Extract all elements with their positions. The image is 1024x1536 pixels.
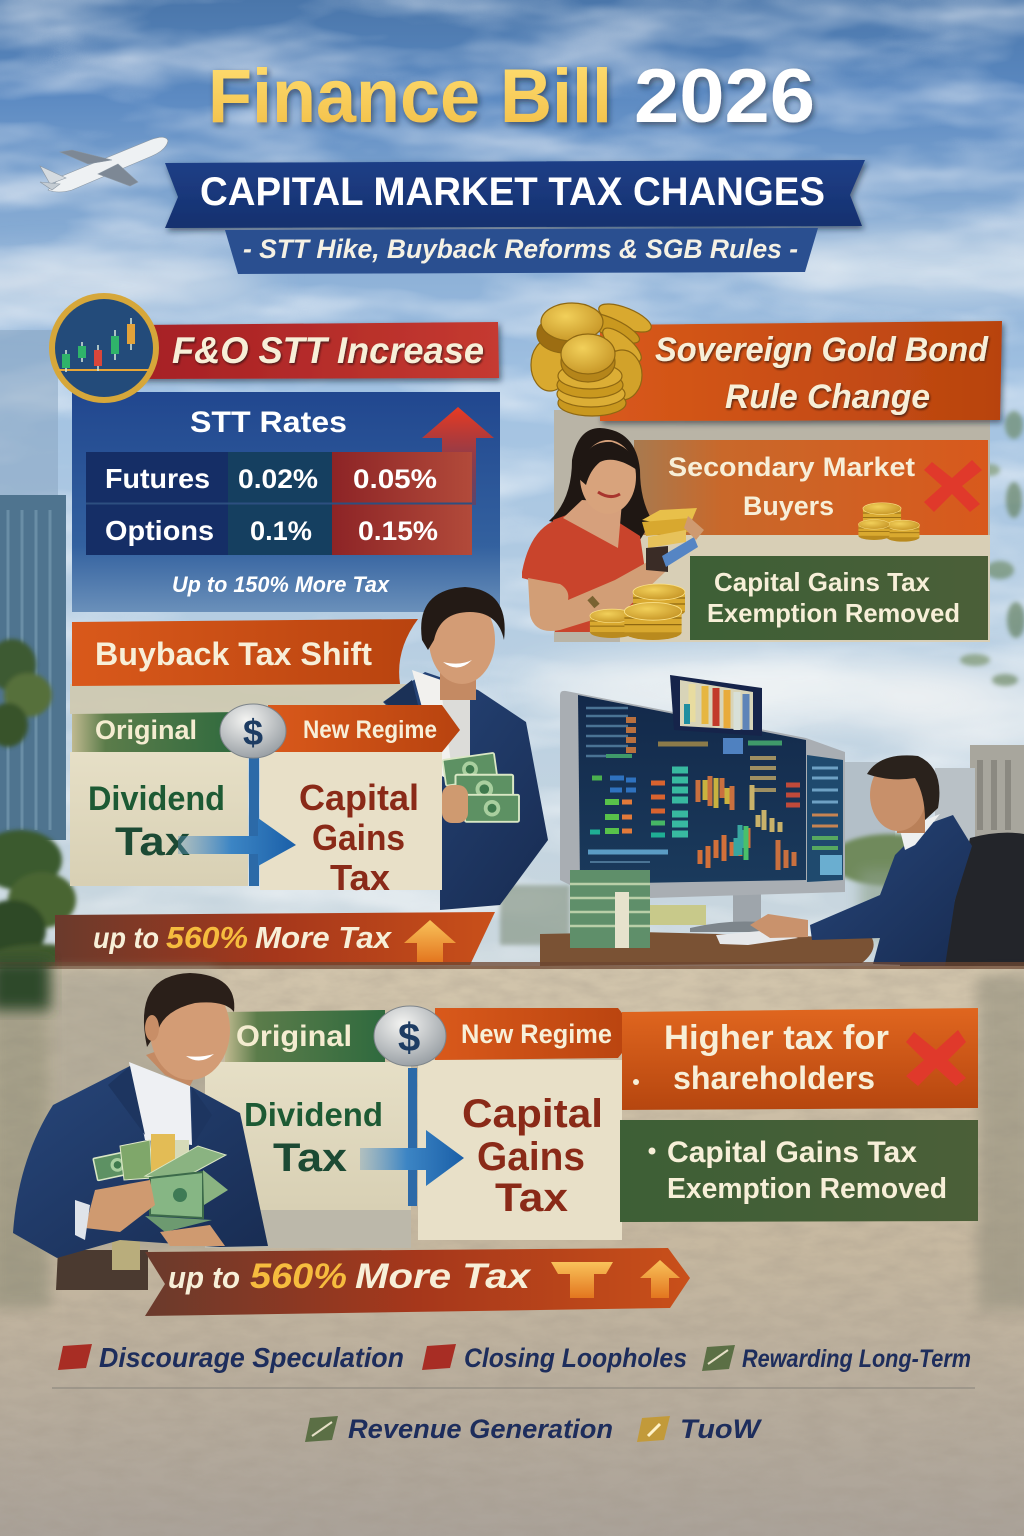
bank card: [662, 537, 698, 567]
city left: [0, 330, 66, 840]
cash bricks: [570, 870, 706, 948]
panel: F&O STT increase: [49, 293, 500, 612]
SGB heading ribbon: [600, 321, 1002, 421]
new regime label: [268, 705, 460, 752]
capital gains box lower: Capital: [462, 1092, 603, 1136]
dividend box: [70, 752, 248, 886]
exemption removed box: Capital Gains Tax: [667, 1136, 917, 1169]
rates table: 0.05%: [353, 464, 437, 494]
exemption removed box: [620, 1120, 978, 1222]
top display: [670, 675, 762, 736]
arrow: red up arrow: [422, 407, 494, 505]
main monitor: [560, 691, 845, 932]
rates table: 0.02%: [238, 464, 318, 494]
rates table: Futures: [105, 463, 210, 494]
scene: trader at monitors: [540, 675, 1024, 966]
gold bars: [642, 508, 704, 572]
callout: up to 560% more tax lower: More Tax: [355, 1257, 532, 1296]
screen: heading and labels: [658, 738, 800, 805]
new regime label lower: [435, 1008, 638, 1060]
F&O heading ribbon: [135, 322, 499, 379]
cash: [443, 753, 519, 822]
woman with gold bars: [522, 428, 704, 640]
higher tax box: Higher tax for: [664, 1019, 889, 1057]
icon: red cross lower: [906, 1030, 966, 1086]
man with cash: [383, 587, 548, 910]
STT rates heading: STT Rates: [190, 406, 347, 439]
capital gains exemption box: [690, 556, 988, 640]
SGB panel backing: [554, 410, 990, 642]
legend item: TuoW: [637, 1414, 763, 1444]
legend item: revenue generation: Revenue Generation: [348, 1414, 613, 1444]
legend: policy goals: [52, 1342, 975, 1444]
icon: red cross: [924, 460, 982, 512]
callout: up to 560% more tax lower: up to: [168, 1260, 240, 1295]
dividend box: Tax: [115, 820, 190, 864]
capital gains box lower: [418, 1060, 622, 1240]
buyback heading: Buyback Tax Shift: [95, 636, 372, 672]
original label: Original: [95, 715, 197, 745]
trader man: [750, 755, 972, 966]
stacked base: [56, 1222, 148, 1290]
callout: up to 560% more tax: [55, 912, 495, 966]
callout: up to 560% more tax lower: 560%: [250, 1257, 347, 1296]
rates table: Options: [105, 515, 214, 546]
STT note: Up to 150% More Tax: [172, 572, 390, 597]
screen: left table: [586, 708, 668, 862]
capital gains box lower: Tax: [495, 1176, 568, 1220]
capital gains box: [260, 752, 442, 898]
callout: up to 560% more tax: More Tax: [255, 920, 393, 955]
gold coins: [590, 584, 685, 640]
screen: teal cells: [672, 770, 688, 834]
rates table: 0.1%: [250, 516, 312, 546]
title: 2026: [634, 54, 815, 139]
trees left: [0, 639, 90, 972]
exemption removed box: Exemption Removed: [667, 1173, 947, 1205]
desk: [540, 932, 874, 966]
callout: up to 560% more tax lower: [145, 1248, 690, 1316]
man with cash lower: [13, 973, 268, 1290]
icon: airplane: [40, 137, 168, 192]
icon: arrows up: [551, 1262, 613, 1298]
dividend box lower: Dividend: [244, 1096, 383, 1133]
cash fan: [93, 1134, 228, 1232]
original label: [72, 712, 240, 752]
screen: candlesticks: [698, 776, 794, 870]
SGB heading ribbon: Sovereign Gold Bond: [655, 331, 989, 369]
arrow: dividend to capital gains: [178, 818, 296, 866]
buyback heading: [72, 619, 418, 686]
new regime label: New Regime: [303, 716, 437, 744]
secondary market buyers box: Buyers: [743, 491, 834, 521]
dividend box lower: [205, 1062, 411, 1248]
rates table: 0.15%: [358, 516, 438, 546]
STT rates panel: [72, 392, 500, 612]
buyback paper backing: [70, 684, 440, 714]
secondary market buyers box: Secondary Market: [668, 452, 915, 482]
callout: up to 560% more tax: 560%: [166, 920, 248, 955]
secondary market buyers box: [634, 440, 988, 542]
capital gains exemption box: Exemption Removed: [707, 598, 960, 628]
capital gains box lower: Gains: [477, 1135, 585, 1179]
rates table: [86, 452, 472, 555]
icon: dollar coin lower: [374, 1006, 446, 1066]
panel: lower tax shift: [13, 973, 978, 1316]
icon: dollar coin lower: $: [398, 1016, 420, 1060]
office chair: [900, 833, 1024, 966]
arrow: dividend to capital gains lower: [360, 1130, 464, 1186]
capital gains exemption box: Capital Gains Tax: [714, 567, 931, 597]
legend item: discourage speculation: Discourage Speculation: [99, 1342, 404, 1373]
heading banner: capital market tax changes: CAPITAL MARKET TAX CHANGES: [200, 170, 825, 214]
higher tax box: shareholders: [673, 1060, 875, 1096]
panel: sovereign gold bond: [522, 298, 1002, 642]
legend item: TuoW: TuoW: [680, 1414, 763, 1444]
keyboard: [716, 930, 798, 945]
subtitle ribbon: - STT Hike, Buyback Reforms & SGB Rules -: [243, 234, 798, 264]
capital gains box: Gains: [312, 817, 405, 858]
original label lower: [225, 1010, 385, 1062]
heading banner: capital market tax changes: [165, 160, 865, 228]
panel: buyback tax shift: [55, 587, 548, 966]
new regime label lower: New Regime: [461, 1019, 612, 1049]
tree right: [960, 411, 1024, 686]
legend item: rewarding long-term: Rewarding Long-Term: [742, 1345, 971, 1373]
capital gains box: Capital: [299, 777, 419, 818]
panel: lower section backing: [0, 960, 1024, 1536]
icon: up arrow: [404, 920, 456, 962]
dividend box: Dividend: [88, 780, 225, 818]
icon: dollar coin: $: [243, 712, 263, 753]
capital gains box: Tax: [330, 857, 390, 898]
F&O heading ribbon: F&O STT Increase: [172, 330, 484, 371]
subtitle ribbon: [225, 228, 818, 274]
callout: up to 560% more tax: up to: [93, 922, 159, 955]
side monitor: [807, 755, 843, 882]
original label lower: Original: [236, 1020, 352, 1053]
legend item: closing loopholes: Closing Loopholes: [464, 1343, 687, 1373]
SGB heading ribbon: Rule Change: [725, 378, 930, 416]
city right: [500, 745, 1024, 970]
icon: dollar coin: [220, 704, 286, 758]
background: sky and landscape: [0, 0, 1024, 972]
title: Finance Bill: [208, 54, 612, 139]
dividend box lower: Tax: [273, 1136, 347, 1180]
icon: gold coin pile: [531, 298, 655, 416]
higher tax box: [622, 1008, 978, 1110]
icon: small coins: [858, 503, 919, 542]
icon: candlestick chart badge: [49, 293, 159, 403]
